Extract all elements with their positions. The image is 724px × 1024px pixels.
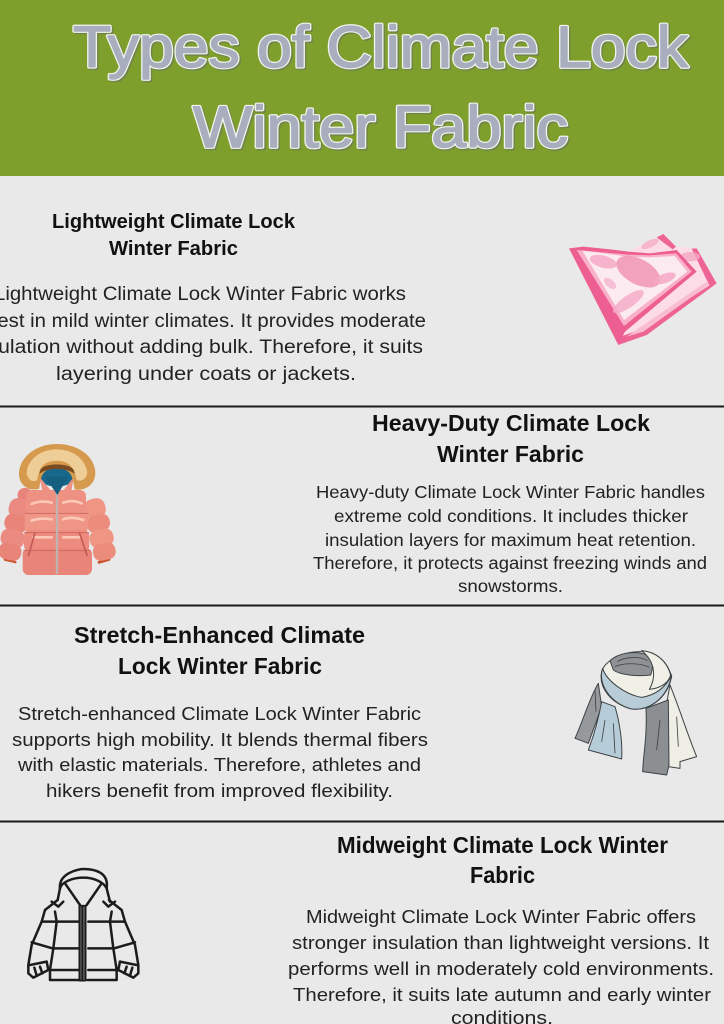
heading: stretch-enhanced: Lock Winter Fabric (118, 653, 322, 679)
text block: heavy-duty description: Heavy-duty Climate Lock Winter Fabric handles (316, 482, 705, 502)
text block: midweight description: stronger insulation than lightweight versions. It (292, 932, 709, 953)
text block: lightweight description (0, 284, 426, 385)
heading: lightweight: Winter Fabric (109, 238, 238, 260)
text block: midweight description: performs well in moderately cold environments. (288, 958, 714, 979)
text block: heavy-duty description: extreme cold conditions. It includes thicker (334, 506, 688, 526)
title: Types of Climate Lock (73, 15, 689, 80)
heading: stretch-enhanced: Stretch-Enhanced Climate (74, 622, 365, 648)
text block: stretch-enhanced description: hikers benefit from improved flexibility. (46, 780, 393, 801)
icon: grey and blue scarf (575, 651, 697, 775)
text block: stretch-enhanced description: with elastic materials. Therefore, athletes and (17, 754, 421, 775)
title (73, 15, 691, 162)
text block: heavy-duty description: Therefore, it protects against freezing winds and (313, 553, 707, 573)
panel: midweight fabric (28, 832, 714, 1024)
text block: heavy-duty description: snowstorms. (458, 576, 563, 596)
title: Types of Climate Lock (74, 16, 691, 82)
heading: midweight (337, 832, 668, 888)
title: Types of Climate Lock (73, 15, 689, 80)
text block: heavy-duty description: insulation layers for maximum heat retention. (325, 530, 696, 550)
divider (0, 604, 724, 606)
text block: midweight description (288, 906, 714, 1024)
icon: pink folded scarf (569, 234, 717, 345)
panel: heavy-duty fabric (0, 410, 707, 596)
title: Winter Fabric (194, 96, 570, 162)
header banner (0, 0, 724, 176)
text block: stretch-enhanced description: Stretch-enhanced Climate Lock Winter Fabric (18, 703, 421, 724)
icon: pink puffer jacket (0, 444, 117, 575)
heading: midweight: Fabric (470, 862, 535, 888)
heading: midweight: Midweight Climate Lock Winter (337, 832, 668, 858)
divider (0, 406, 724, 408)
text block: lightweight description: layering under coats or jackets. (56, 364, 356, 385)
text block: midweight description: Therefore, it suits late autumn and early winter (293, 984, 711, 1005)
panel: lightweight fabric (0, 211, 717, 385)
title: Winter Fabric (193, 95, 568, 160)
heading: lightweight (52, 211, 296, 260)
panel: stretch-enhanced fabric (12, 622, 697, 801)
heading: stretch-enhanced (74, 622, 365, 679)
heading: heavy-duty: Winter Fabric (437, 441, 584, 467)
divider (0, 820, 724, 822)
text block: lightweight description: Lightweight Climate Lock Winter Fabric works (0, 284, 406, 305)
icon: outline puffer jacket (28, 869, 138, 981)
heading: heavy-duty: Heavy-Duty Climate Lock (372, 410, 650, 436)
heading: heavy-duty (372, 410, 650, 467)
text block: heavy-duty description (313, 482, 707, 596)
text block: midweight description: Midweight Climate Lock Winter Fabric offers (306, 906, 696, 927)
title: Winter Fabric (193, 95, 568, 160)
text block: stretch-enhanced description (12, 703, 428, 801)
heading: lightweight: Lightweight Climate Lock (52, 211, 296, 233)
text block: stretch-enhanced description: supports high mobility. It blends thermal fibers (12, 729, 428, 750)
